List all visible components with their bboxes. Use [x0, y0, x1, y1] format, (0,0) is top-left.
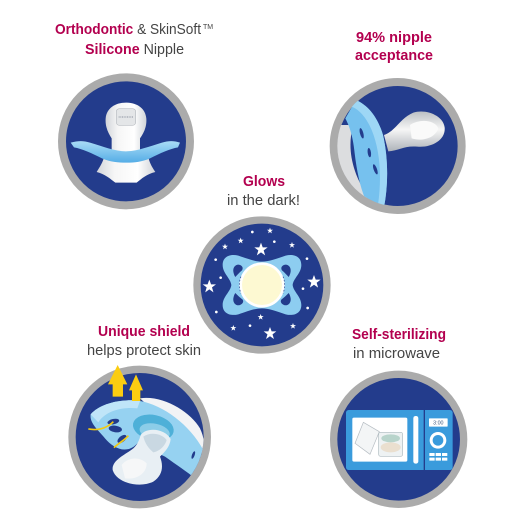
heading: silicone nipple: Silicone Nipple: [85, 41, 184, 58]
panel: unique shield: [72, 323, 207, 505]
heading: orthodontic and SkinSoft: Orthodontic & SkinSoft: [55, 21, 202, 38]
panel: nipple acceptance: [333, 29, 462, 210]
heading: 94% nipple acceptance: acceptance: [355, 47, 433, 64]
panel: glows in the dark: [197, 173, 327, 350]
trademark mark: TM: [203, 24, 213, 31]
heading: self-sterilizing: Self-sterilizing: [352, 326, 446, 343]
icon: pacifier with airflow shield: [72, 365, 207, 505]
subheading: helps protect skin: helps protect skin: [87, 342, 201, 359]
icon: glowing pacifier with stars: [197, 220, 327, 350]
heading: 94% nipple acceptance: [355, 29, 433, 64]
subheading: in microwave: in microwave: [353, 345, 440, 362]
heading: unique shield: Unique shield: [98, 323, 190, 340]
icon: microwave: [334, 374, 464, 504]
icon: yellow arrows: [108, 365, 143, 401]
heading: 94% nipple acceptance: 94% nipple: [356, 29, 432, 46]
heading: glows: Glows: [243, 173, 285, 190]
icon: microwave: 3:00: [433, 420, 444, 426]
icon: pacifier front view: [62, 77, 190, 205]
panel: self-sterilizing: [334, 326, 464, 504]
panel: orthodontic nipple: [55, 21, 213, 205]
icon: pacifier side view: [333, 82, 462, 210]
subheading: in the dark: in the dark!: [227, 192, 300, 209]
